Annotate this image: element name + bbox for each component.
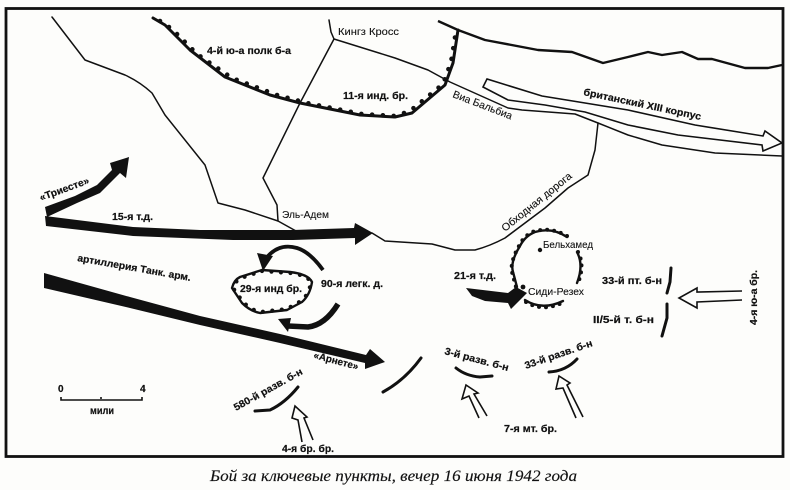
scale: zero: 0 xyxy=(58,384,64,395)
label: 33rd Infantry Battalion: 33-й пт. б-н xyxy=(602,275,662,287)
position line: 33rd Infantry Battalion xyxy=(667,268,671,293)
label: Trieste: «Триесте» xyxy=(38,176,91,204)
arrow: Panzer Army artillery xyxy=(44,273,385,369)
label: 11th Indian brigade: 11-я инд. бр. xyxy=(343,90,408,102)
position line: centre arc xyxy=(383,358,421,392)
open arrow: 7th Motor Brigade east xyxy=(556,376,583,418)
scale: four: 4 xyxy=(140,384,146,395)
arrow: 15th Panzer Division xyxy=(45,216,373,245)
open arrow: 4th South African Brigade xyxy=(679,288,742,308)
position line: 3rd Recon Battalion xyxy=(456,368,492,377)
label: British XIII Corps: британский XIII корпус xyxy=(582,86,703,123)
arrow: 90th Light lower curve xyxy=(278,304,338,332)
label: El Adem: Эль-Адем xyxy=(282,209,329,221)
road: bypass road xyxy=(372,123,598,250)
minefield line with tick marks xyxy=(153,18,458,117)
label: Panzer Army artillery: артиллерия Танк. арм. xyxy=(76,253,192,284)
label: 4th South African regiment: 4-й ю-а полк б-а xyxy=(207,45,291,57)
29th Indian Brigade box xyxy=(232,270,312,313)
Sidi Rezegh box xyxy=(512,230,593,307)
arrow: 21st Panzer Division xyxy=(466,287,527,309)
label: Ariete: «Арнете» xyxy=(312,350,360,373)
road: Via Balbia xyxy=(334,39,782,156)
label: bypass road: Обходная дорога xyxy=(499,170,575,234)
caption: Бой за ключевые пункты, вечер 16 июня 1942 года xyxy=(209,468,577,485)
label: 3rd Recon Battalion: 3-й разв. б-н xyxy=(443,345,510,374)
label: 4th South African Brigade: 4-я ю-а бр. xyxy=(748,270,760,325)
label: 15th Panzer Division: 15-я т.д. xyxy=(112,212,153,223)
label: 4th Armoured Brigade: 4-я бр. бр. xyxy=(282,443,334,455)
label: Kings Cross: Кингз Кросс xyxy=(338,26,399,38)
label: Via Balbia: Виа Бальбиа xyxy=(451,89,514,122)
position line: 33rd Recon Battalion xyxy=(549,359,577,372)
position line: II/5th Tank Battalion xyxy=(662,304,667,336)
label: Sidi Rezegh: Сиди-Резех xyxy=(528,286,585,298)
scale bar xyxy=(58,384,146,417)
label: 90th Light Division: 90-я легк. д. xyxy=(321,279,383,290)
arrow: Trieste division xyxy=(45,157,129,217)
label: 7th Motor Brigade: 7-я мт. бр. xyxy=(504,423,557,435)
label: II/5th Tank Battalion: II/5-й т. б-н xyxy=(593,314,654,326)
label: 21st Panzer Division: 21-я т.д. xyxy=(454,271,496,282)
arrow: 90th Light upper curve xyxy=(257,247,323,271)
point: Sidi Rezegh xyxy=(521,285,525,289)
open arrow: 7th Motor Brigade west xyxy=(462,385,487,418)
road: north-south track through El Adem xyxy=(263,20,334,221)
label: 29th Indian Brigade: 29-я инд бр. xyxy=(240,283,302,295)
point: Belhamed xyxy=(538,248,542,252)
label: Belhamed: Бельхамед xyxy=(543,239,593,251)
coastline xyxy=(438,21,782,68)
road: western track xyxy=(52,17,296,231)
label: 580th Recon Battalion: 580-й разв. б-н xyxy=(232,366,305,414)
label: 33rd Recon Battalion: 33-й разв. б-н xyxy=(523,337,594,372)
arrow: British XIII Corps xyxy=(483,79,782,151)
position line: 580th Recon Battalion xyxy=(255,387,298,411)
scale: miles: мили xyxy=(90,406,114,417)
open arrow: 4th Armoured Brigade xyxy=(292,406,313,442)
